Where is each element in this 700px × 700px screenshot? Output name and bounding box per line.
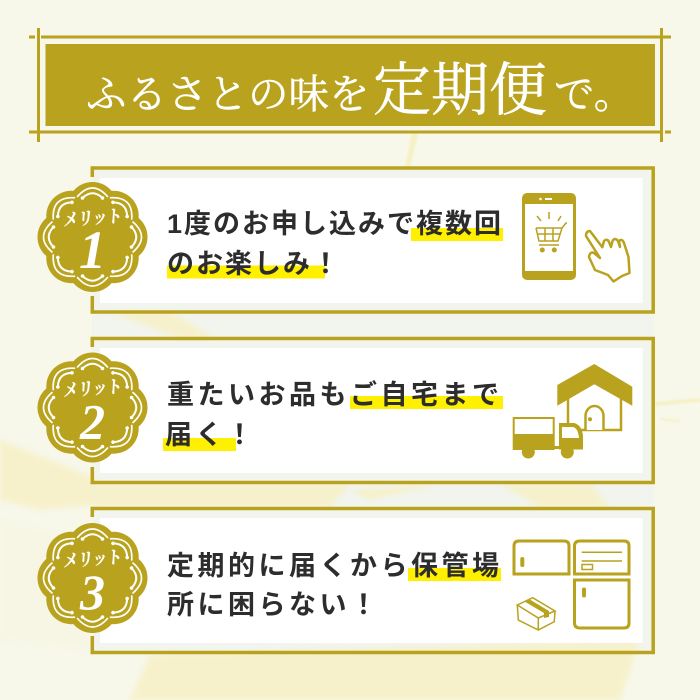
banner heading: 定期便 xyxy=(373,58,547,123)
highlights xyxy=(167,228,503,278)
panel: merit 2 xyxy=(38,338,653,482)
panel frame xyxy=(92,338,653,482)
badge: merit 3: 3 xyxy=(79,564,105,620)
merit text: 所に困らない！ xyxy=(167,590,380,620)
merit text: 1度のお申し込みで複数回 xyxy=(167,209,503,239)
badge: merit 3 xyxy=(38,523,148,633)
panel frame xyxy=(92,168,653,312)
banner heading: ふるさとの味を xyxy=(86,72,370,117)
panel background xyxy=(100,348,642,473)
banner heading: で。 xyxy=(554,72,634,117)
badge: merit 1: 1 xyxy=(79,220,106,280)
panel: merit 1 xyxy=(38,168,653,312)
merit text: 重たいお品もご自宅まで xyxy=(167,379,502,410)
icon: smartphone with shopping cart and pointing hand xyxy=(522,193,630,282)
banner fill xyxy=(46,44,655,126)
highlight xyxy=(408,568,501,581)
panel: merit 3 xyxy=(38,508,653,652)
panel frame xyxy=(92,508,653,652)
panel background xyxy=(100,518,642,643)
icon: refrigerators and cardboard box xyxy=(514,541,629,630)
badge: merit 3: メリット xyxy=(63,547,123,571)
banner frame lines xyxy=(29,28,671,142)
badge: merit 1: メリット xyxy=(63,206,123,230)
badge: merit 2: メリット xyxy=(63,376,123,401)
badge: merit 1 xyxy=(38,182,148,292)
panel background xyxy=(100,178,642,303)
icon: house and delivery truck xyxy=(513,364,632,458)
badge: merit 2 xyxy=(38,352,148,462)
badge: merit 2: 2 xyxy=(79,394,105,450)
title banner xyxy=(29,28,671,142)
highlights xyxy=(163,396,503,451)
merit text: のお楽しみ！ xyxy=(167,249,341,279)
merit text: 届く！ xyxy=(165,420,256,450)
merit text: 定期的に届くから保管場 xyxy=(167,551,502,581)
